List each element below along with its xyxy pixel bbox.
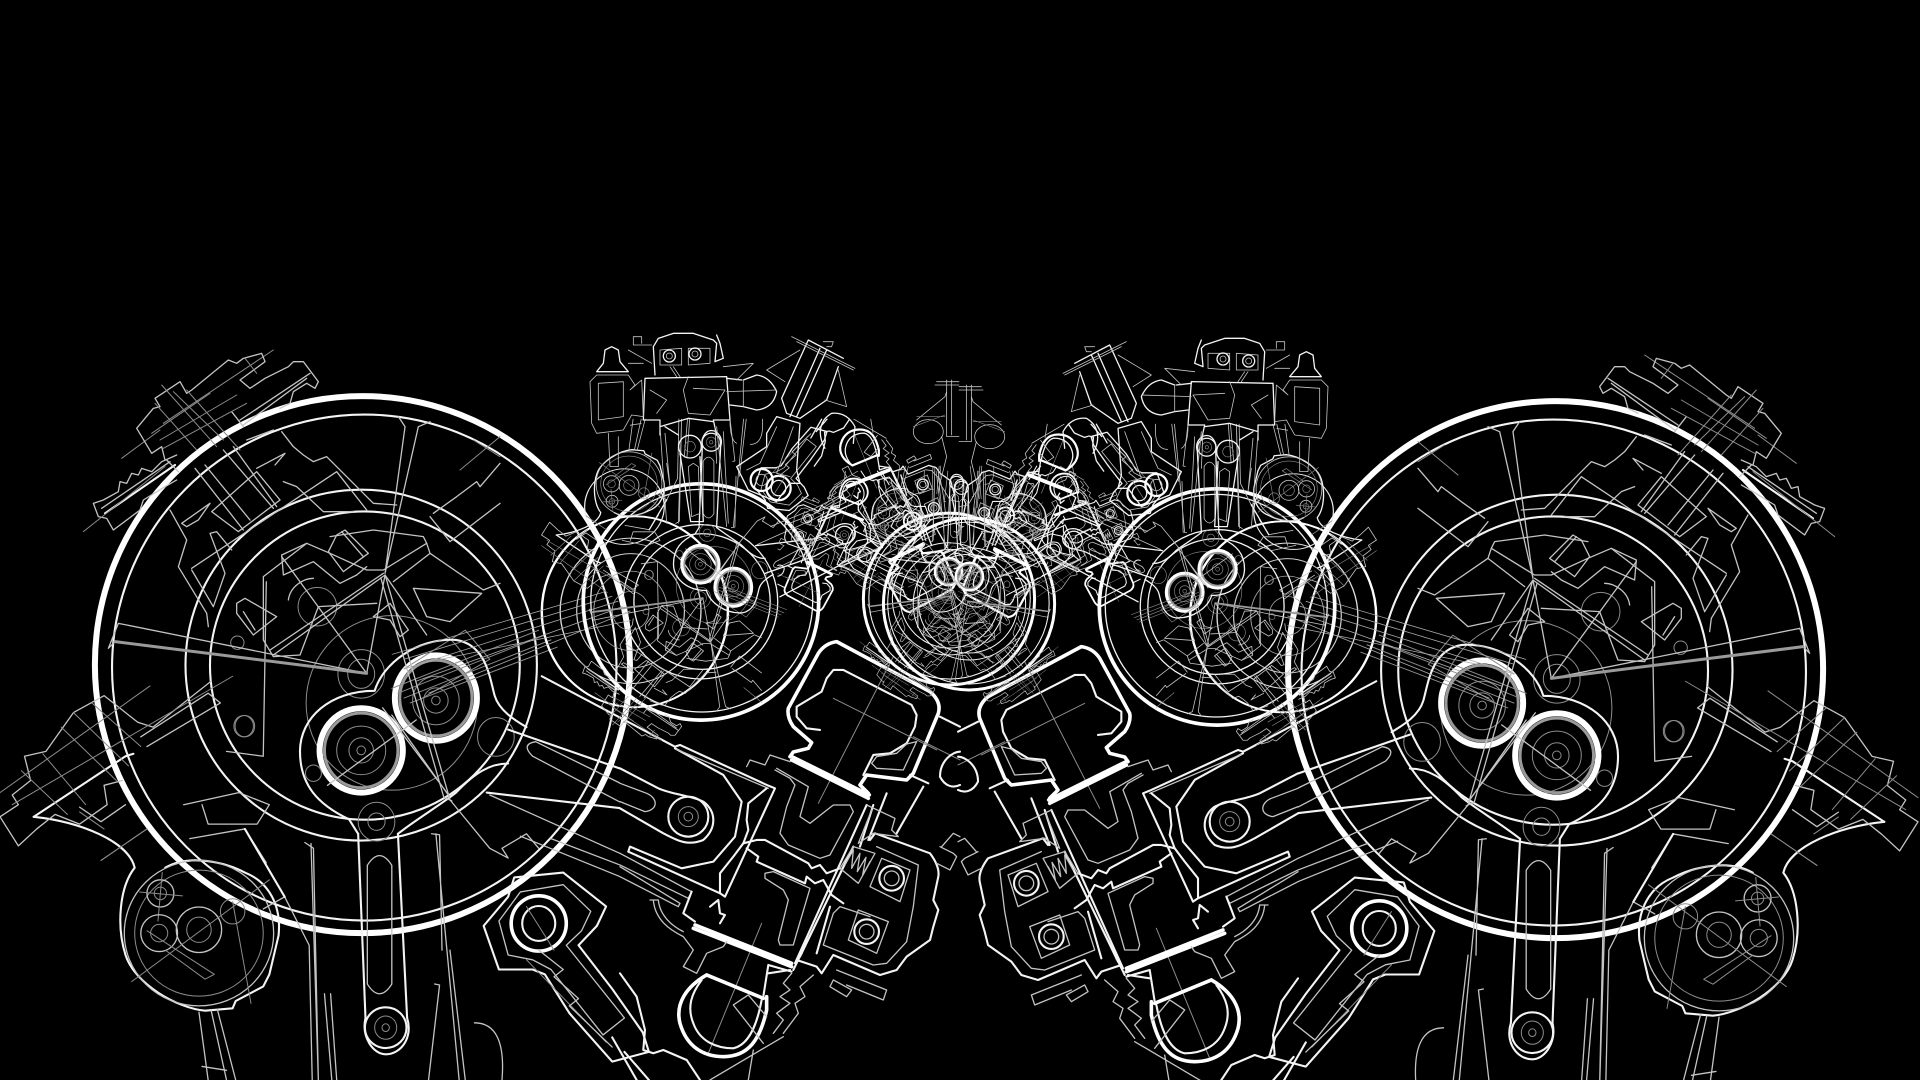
central head block [633,333,730,527]
large engine cross-section [0,350,960,1080]
secondary concentric rings [392,469,728,707]
centre gray ports [708,768,853,1053]
right valve loop [723,363,777,443]
lower piston assembly [484,873,649,1080]
timing gear housing [34,817,279,1080]
crank circles [234,630,557,841]
left dome head [590,347,652,467]
left engine assembly [0,333,1140,1080]
upper head block [788,642,960,803]
cylinder head and valves (traced) [620,642,960,1080]
mirrored right engine assembly [778,338,1918,1080]
rod housing [620,745,790,907]
right cluster loop [820,413,855,448]
right valve block [797,805,960,1000]
left arm [0,582,539,909]
upper left arm and cam plates (traced) [83,350,500,673]
lower valve bar [650,892,792,973]
valve loop [620,965,813,1080]
medium engine heads (traced) [590,333,959,527]
lower right rod extension [487,676,675,876]
tilted piston rod [737,337,855,502]
vertical connecting rod [285,834,503,1080]
upper left arm [83,350,500,627]
vertical rails [793,787,923,970]
flywheel rings [95,396,630,933]
medium engine copy [542,419,964,740]
cam plates [231,417,500,673]
small engine copy [833,466,1140,700]
central axis head [913,380,959,502]
spokes [108,623,367,673]
rod housing outline [300,640,526,834]
